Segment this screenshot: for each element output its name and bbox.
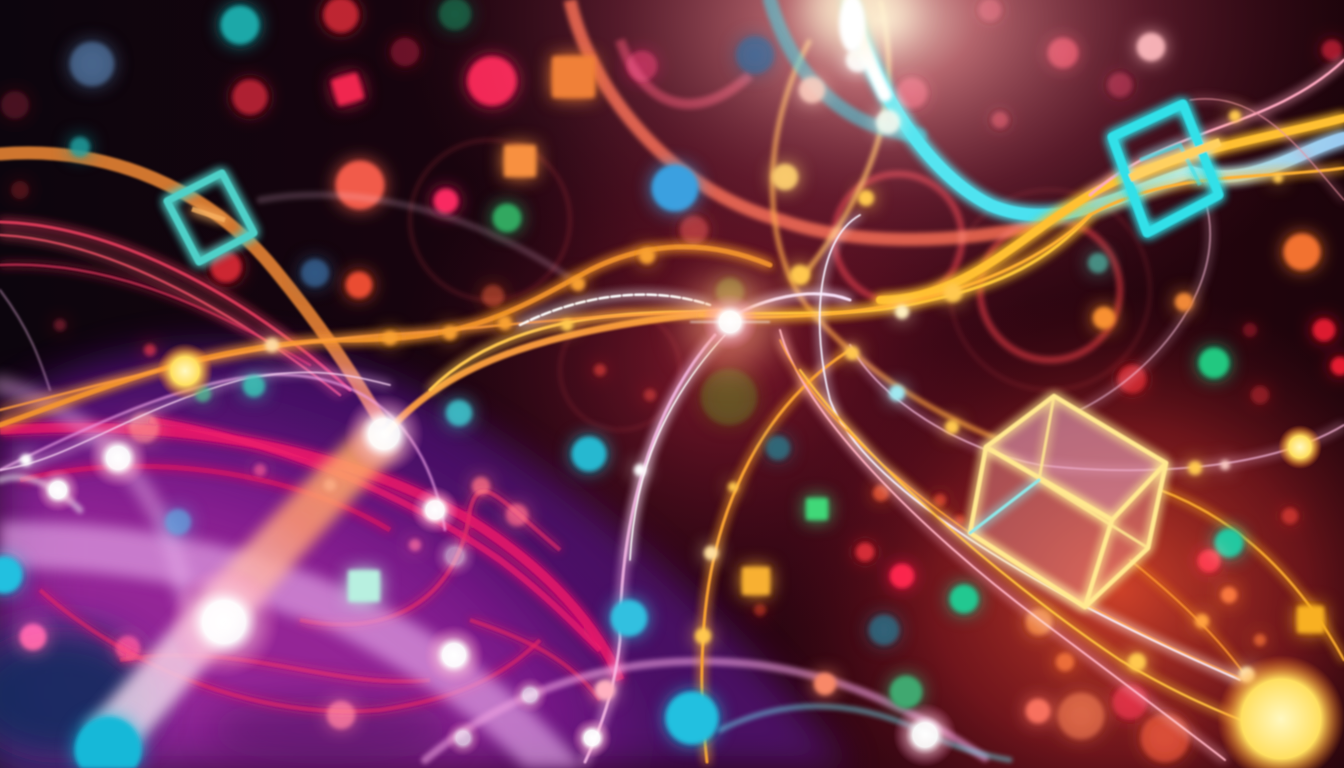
blurred orange arcs at top xyxy=(570,0,1040,440)
magenta swirl lines left xyxy=(0,420,620,711)
bright diagonal beam xyxy=(85,312,725,760)
orange arc top left xyxy=(0,153,580,420)
long golden wave xyxy=(0,215,1090,470)
top light flare xyxy=(806,0,910,52)
large white glow nodes xyxy=(36,394,957,767)
wireframe diamond top left xyxy=(167,173,254,262)
large yellow glow nodes xyxy=(157,343,1344,768)
glass cube xyxy=(970,396,1166,607)
lavender translucent bands xyxy=(0,375,1010,768)
golden band right xyxy=(700,60,1344,317)
glowing nodes on strands xyxy=(20,48,1283,700)
central star burst xyxy=(686,278,774,366)
white and pink arcs from centre xyxy=(585,200,1344,762)
wireframe diamond top right xyxy=(1112,104,1220,233)
blurred red rings xyxy=(410,140,1150,430)
cyan swoosh xyxy=(770,0,1344,215)
bokeh dots: green xyxy=(195,0,1243,708)
purple nebula band xyxy=(0,346,850,768)
square bokeh particles xyxy=(331,56,1324,633)
